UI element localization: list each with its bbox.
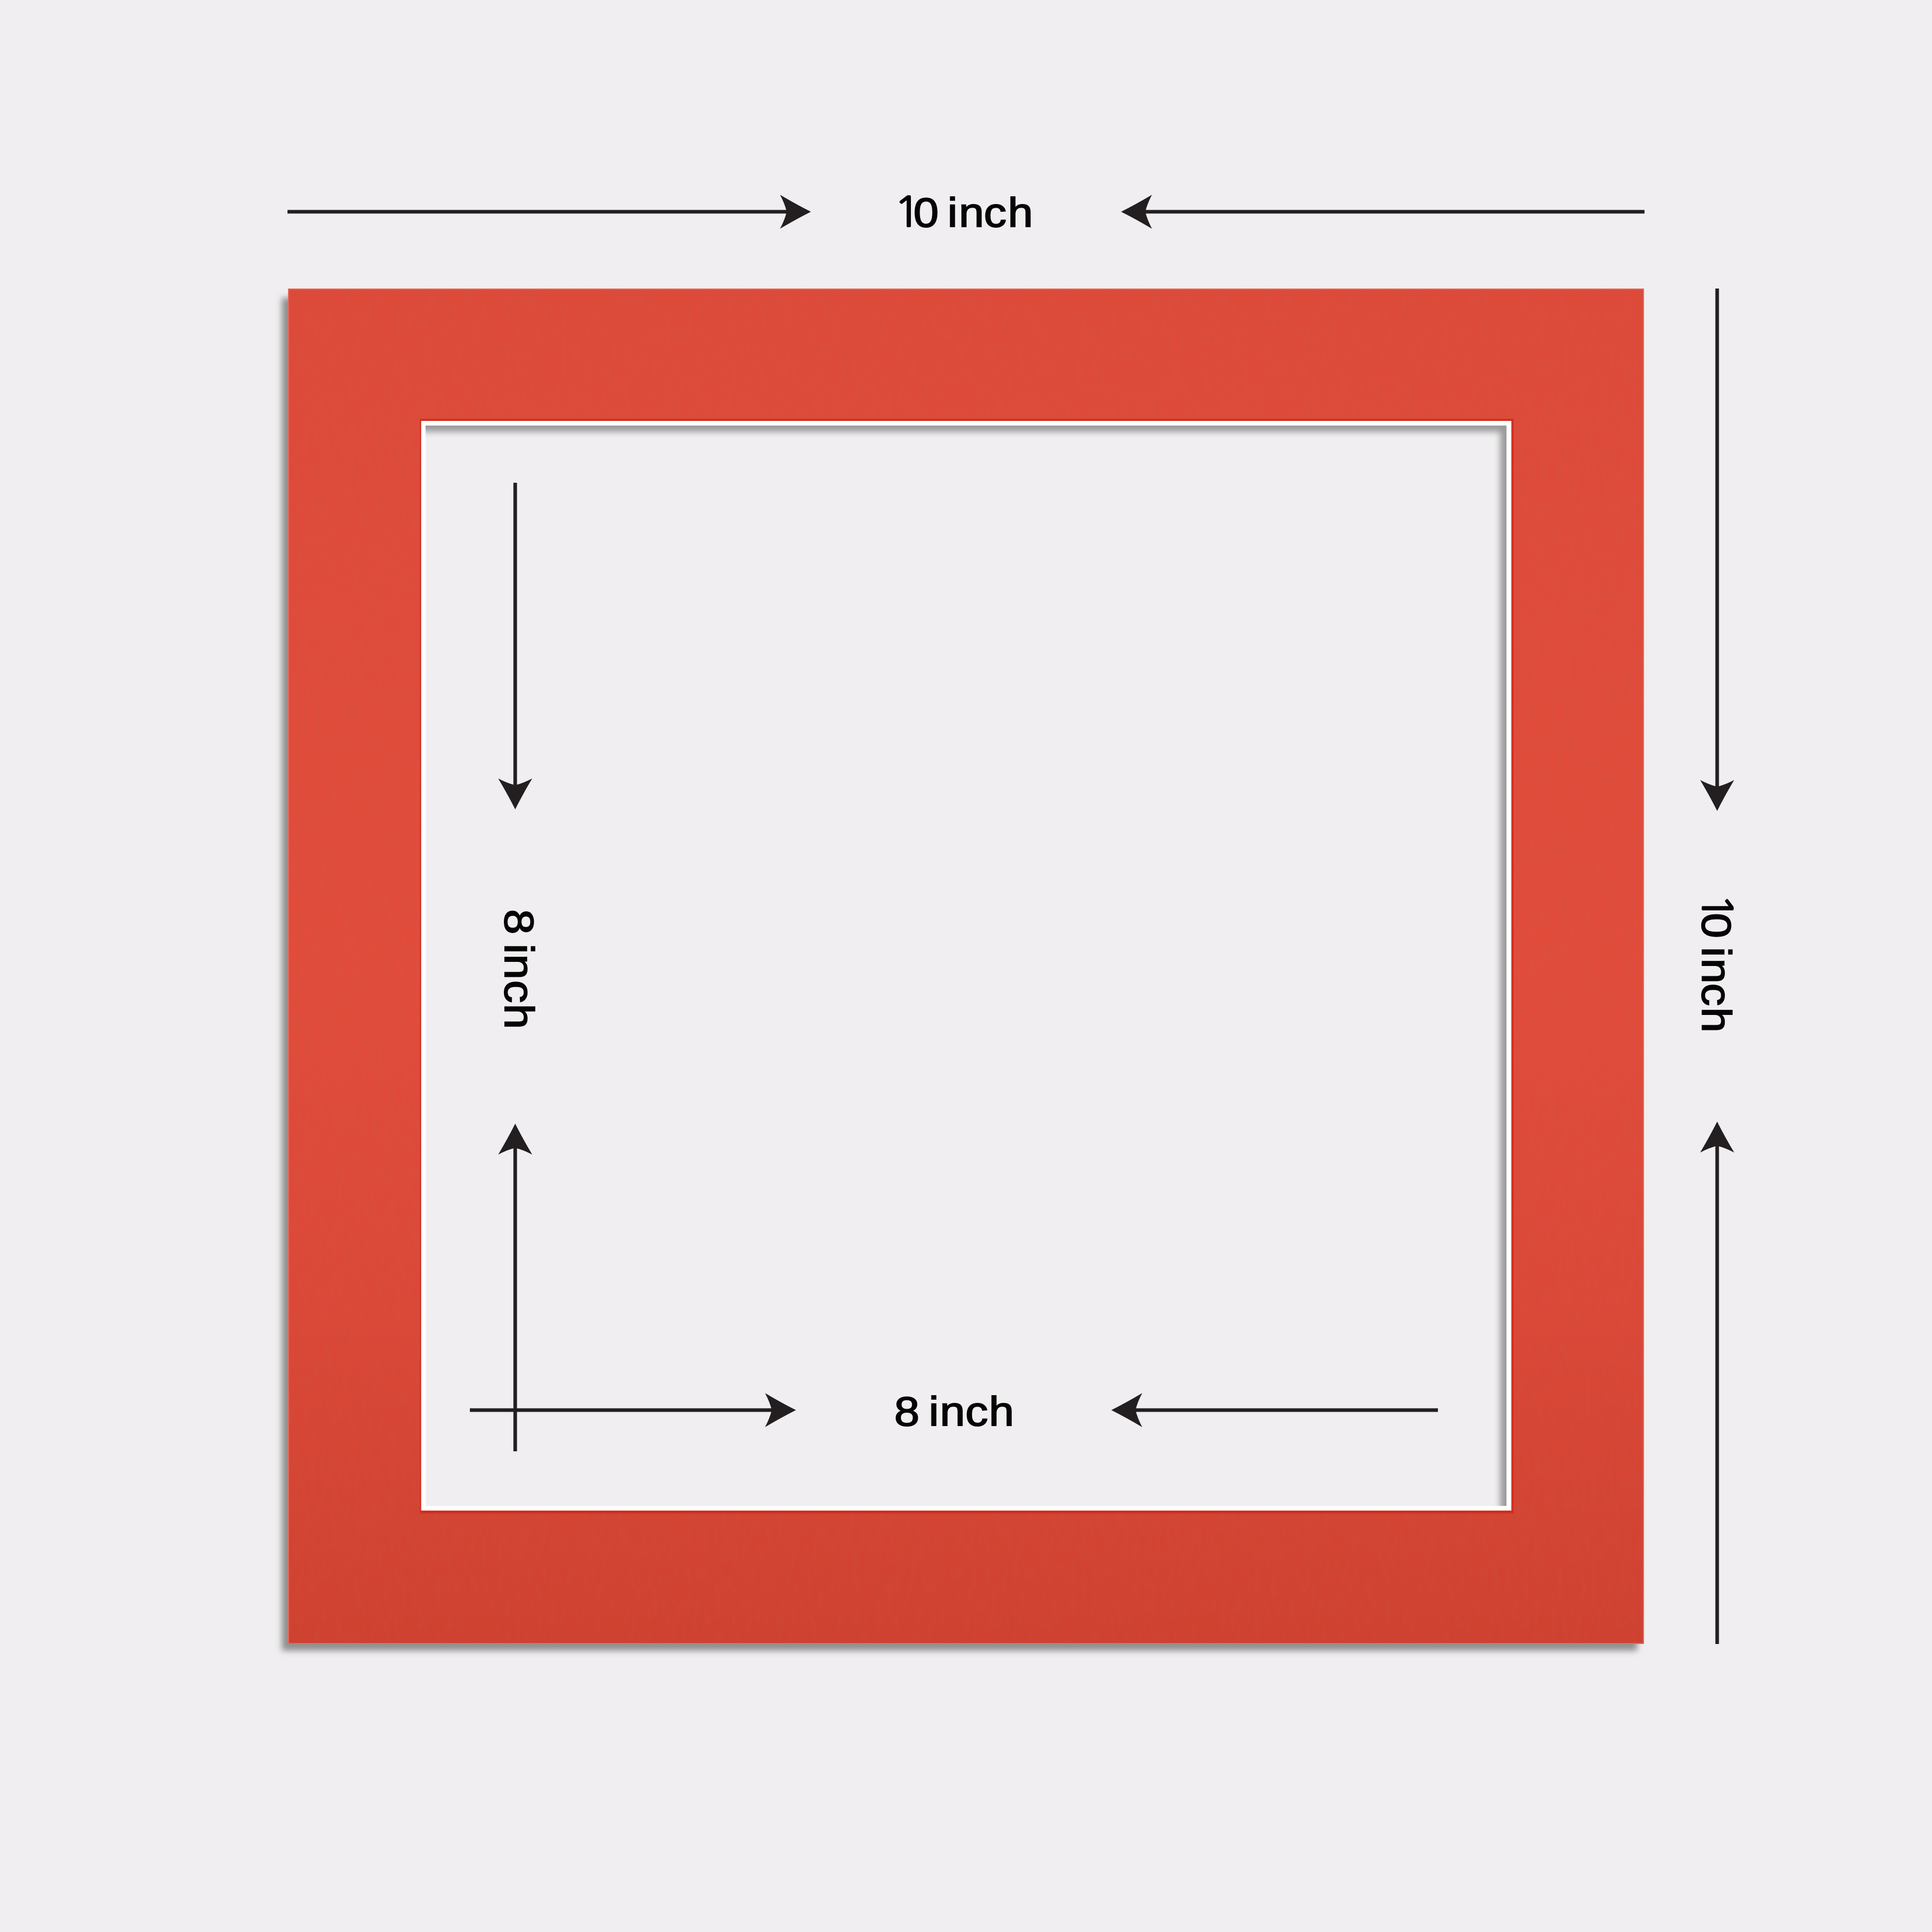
label: inner left 8 inch: 8 inch [496, 909, 542, 1029]
arrow: right side upward, 10 inch height [1700, 1122, 1734, 1644]
arrow: top right, 10 inch width [1121, 195, 1645, 229]
mat drop shadow [282, 298, 1637, 1651]
opening cut edge [420, 419, 1514, 1514]
arrow: inner bottom leftward, 8 inch width [1111, 1393, 1438, 1427]
mat surface with square opening [288, 289, 1644, 1644]
paper texture [288, 289, 1644, 1644]
label: inner bottom 8 inch: 8 inch [894, 1388, 1014, 1434]
arrow: right side downward, 10 inch height [1700, 289, 1734, 811]
arrow: inner left upward, 8 inch height [498, 1124, 532, 1451]
opening inner shadow [426, 426, 1506, 1506]
label: right 10 inch: 10 inch [1693, 893, 1739, 1032]
arrow: top left, 10 inch width [287, 195, 811, 229]
label: top 10 inch: 10 inch [894, 190, 1033, 235]
arrow: inner bottom rightward, 8 inch width [470, 1393, 796, 1427]
opening white bevel [423, 423, 1509, 1509]
arrow: inner left downward, 8 inch height [498, 483, 532, 809]
mat outer light edge [289, 289, 1643, 1643]
panel: red mat board [282, 289, 1644, 1651]
